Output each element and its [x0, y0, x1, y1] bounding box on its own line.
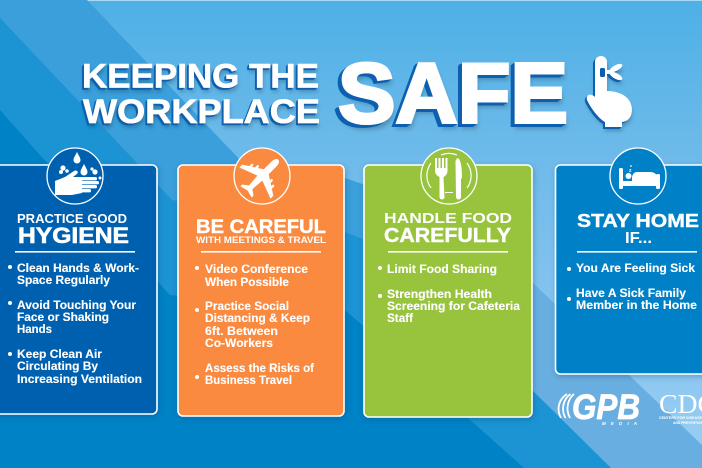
- panel: practice good hygiene: [0, 148, 157, 414]
- logo: GPB Media: MEDIA: [602, 421, 637, 426]
- title: keeping the workplace: WORKPLACE: [83, 93, 320, 131]
- list: hygiene tips: Circulating By: [17, 361, 99, 373]
- list: travel tips: When Possible: [205, 277, 289, 289]
- panel: handle food carefully: [364, 148, 532, 417]
- logo: GPB Media: GPB: [572, 388, 640, 427]
- list: travel tips: Assess the Risks of: [205, 363, 314, 375]
- heading: be careful: WITH MEETINGS & TRAVEL: [196, 235, 326, 246]
- list: travel tips: Business Travel: [205, 375, 292, 387]
- icon: finger with bandage bow: [587, 56, 632, 127]
- list: hygiene tips: Hands: [17, 324, 52, 336]
- panel: be careful with meetings and travel: [178, 144, 344, 416]
- list: stay home reasons: You Are Feeling Sick: [576, 263, 696, 275]
- list: food tips: Screening for Cafeteria: [387, 301, 521, 313]
- list: stay home reasons: Member in the Home: [576, 300, 697, 312]
- icon: person in bed: z: [630, 163, 632, 168]
- list: hygiene tips: Avoid Touching Your: [17, 300, 137, 312]
- heading: handle food carefully: [384, 210, 512, 247]
- icon: person in bed: z: [629, 168, 632, 174]
- icon: person in bed: [610, 148, 666, 204]
- list: stay home reasons: Have A Sick Family: [576, 288, 687, 300]
- icon: washing hands: [47, 148, 103, 204]
- list: stay home reasons: [567, 263, 697, 312]
- list: hygiene tips: Face or Shaking: [17, 312, 109, 324]
- list: food tips: Strengthen Health: [387, 289, 492, 301]
- list: food tips: [378, 264, 521, 325]
- list: food tips: Limit Food Sharing: [387, 264, 497, 276]
- list: hygiene tips: Space Regularly: [17, 275, 111, 287]
- list: hygiene tips: Clean Hands & Work-: [17, 263, 139, 275]
- heading: practice good hygiene: HYGIENE: [18, 223, 129, 248]
- heading: practice good hygiene: [17, 211, 129, 248]
- title: keeping the workplace: KEEPING THE: [82, 58, 319, 96]
- title: keeping the workplace: [82, 58, 320, 131]
- heading: handle food carefully: CAREFULLY: [384, 224, 511, 247]
- logo: CDC: AND PREVENTION: [673, 421, 702, 425]
- heading: handle food carefully: HANDLE FOOD: [384, 210, 512, 227]
- list: travel tips: Practice Social: [205, 301, 289, 313]
- title: safe: SAFE: [338, 46, 568, 142]
- list: travel tips: Video Conference: [205, 264, 308, 276]
- list: hygiene tips: Keep Clean Air: [17, 349, 103, 361]
- heading: practice good hygiene: PRACTICE GOOD: [17, 211, 127, 226]
- icon: fork and knife on plate: [421, 148, 477, 204]
- list: travel tips: Co-Workers: [205, 338, 273, 350]
- list: travel tips: [195, 264, 314, 387]
- list: travel tips: 6ft. Between: [205, 326, 278, 338]
- heading: stay home if: [577, 210, 699, 247]
- heading: stay home if: IF...: [625, 230, 652, 247]
- list: hygiene tips: Increasing Ventilation: [17, 374, 142, 386]
- list: travel tips: Distancing & Keep: [205, 313, 310, 325]
- heading: be careful: BE CAREFUL: [196, 216, 326, 238]
- title: [82, 46, 568, 142]
- panel: stay home if: [556, 148, 702, 374]
- list: food tips: Staff: [387, 313, 413, 325]
- heading: stay home if: STAY HOME: [577, 210, 699, 231]
- icon: airplane: [231, 144, 294, 207]
- list: hygiene tips: [8, 263, 142, 386]
- icon: bandage mark: [600, 68, 605, 77]
